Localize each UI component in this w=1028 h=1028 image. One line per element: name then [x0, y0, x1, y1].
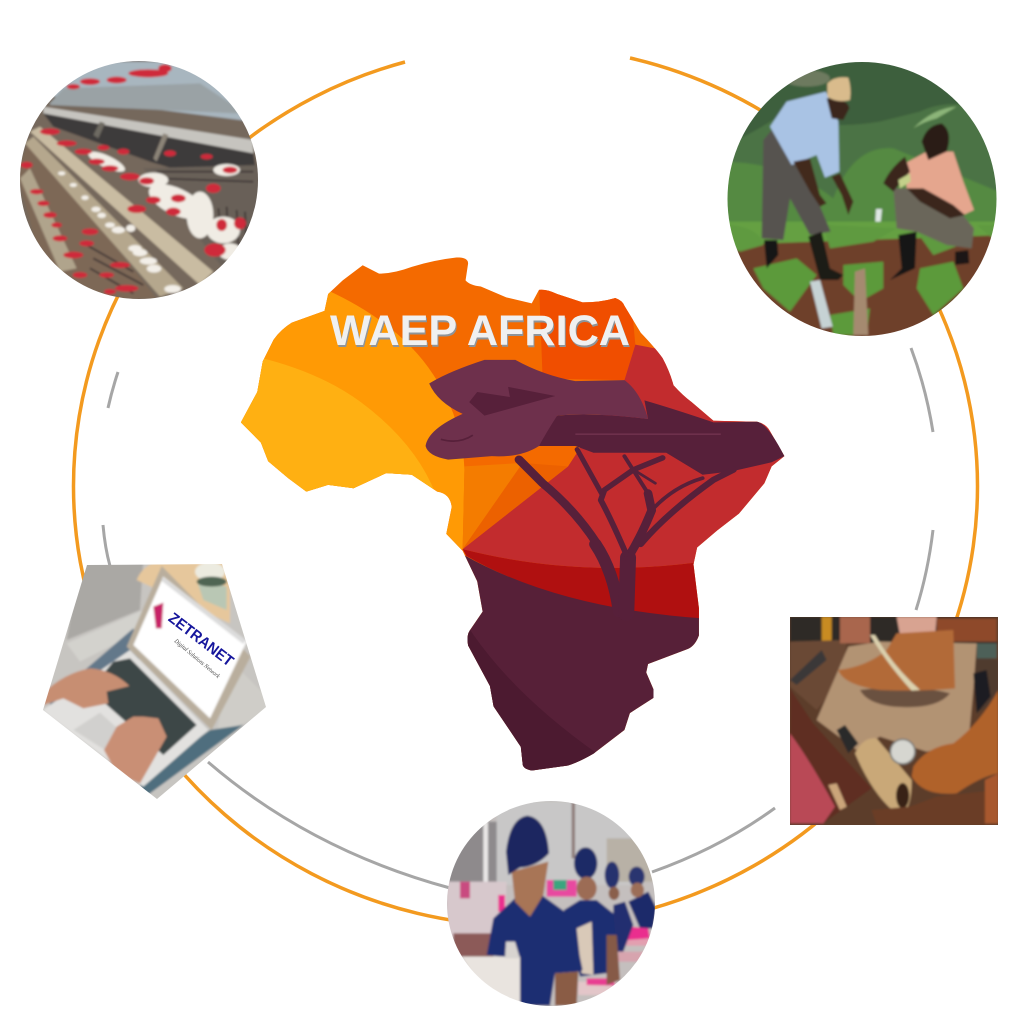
- photo: farmers in field circle: [728, 62, 996, 336]
- left farmer: [762, 77, 853, 280]
- Africa map with acacia tree: [230, 250, 812, 780]
- title: WAEP AFRICA: WAEP AFRICA: [330, 307, 630, 355]
- logo tagline: Digital Solutions Network: [172, 637, 221, 680]
- Zetranet logo text: ZETRANET: [165, 610, 237, 671]
- front worker: [487, 816, 583, 1006]
- orange outer ring: [73, 58, 977, 926]
- photo: garment workers circle: [447, 801, 655, 1006]
- acacia tree: [426, 360, 784, 613]
- map colour bands: [230, 250, 812, 780]
- title: WAEP AFRICA: WAEP AFRICA: [331, 309, 631, 357]
- grey inner ring segments: [103, 348, 933, 888]
- photo: poultry farm circle: [20, 61, 258, 299]
- photo: shoemaker square: [790, 617, 998, 825]
- right farmer: [883, 123, 974, 280]
- back workers: [564, 847, 657, 985]
- photo: laptop pentagon with Zetranet logo: [43, 564, 266, 799]
